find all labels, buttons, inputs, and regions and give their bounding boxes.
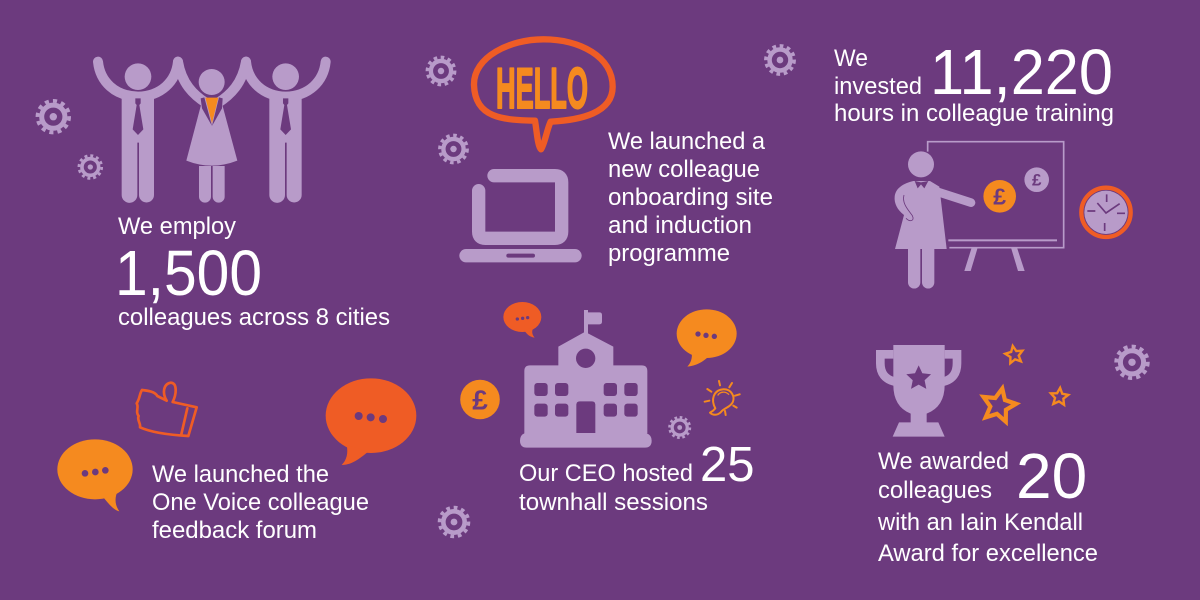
- icon: three colleagues with raised arms: [98, 62, 326, 203]
- text: training hours stat: hours in colleague training: [834, 100, 1114, 127]
- icon: town hall building: [520, 310, 652, 448]
- icon: light bulb: [705, 381, 740, 415]
- icon: gear 5: [766, 46, 794, 74]
- icon: lilac pound coin: [1024, 167, 1049, 192]
- text: onboarding site: and induction: [608, 212, 752, 239]
- icon: small star top: [1004, 344, 1024, 364]
- icon: trophy: [880, 345, 957, 437]
- text: awards stat: with an Iain Kendall: [877, 509, 1083, 536]
- icon: hello speech bubble: HELLO: [496, 57, 588, 121]
- icon: orange pound coin: £: [993, 184, 1006, 210]
- text: townhall sessions stat: [519, 438, 755, 516]
- text: training hours stat: We: [834, 45, 868, 72]
- icon: small red speech bubble: [503, 302, 541, 338]
- icon: presenter at whiteboard: [895, 142, 1064, 288]
- text: training hours stat: 11,220: [930, 36, 1113, 108]
- icon: large star: [979, 385, 1019, 423]
- text: one voice forum: We launched the: [152, 461, 329, 488]
- icon: gear 4: [440, 135, 467, 163]
- text: townhall sessions stat: townhall sessions: [519, 489, 708, 516]
- text: one voice forum: [152, 461, 369, 544]
- text: training hours stat: invested: [834, 73, 922, 100]
- text: we employ stat: We employ: [118, 213, 236, 240]
- text: onboarding site: onboarding site: [608, 184, 773, 211]
- text: one voice forum: One Voice colleague: [152, 489, 369, 516]
- icon: thumbs up: [137, 383, 197, 436]
- icon: gear 8: [439, 507, 469, 537]
- icon: gear 2: [79, 156, 102, 178]
- text: onboarding site: [608, 128, 773, 267]
- icon: laptop: [459, 176, 582, 262]
- icon: hello speech bubble: [474, 39, 613, 149]
- icon: gear 6: [669, 417, 690, 438]
- text: townhall sessions stat: 25: [700, 438, 755, 492]
- text: we employ stat: 1,500: [115, 237, 262, 309]
- icon: orange pound coin: [983, 180, 1016, 213]
- text: onboarding site: new colleague: [608, 156, 760, 183]
- icon: wall clock: [1081, 188, 1131, 237]
- icon: gear 1: [38, 101, 69, 132]
- text: training hours stat: [834, 36, 1114, 127]
- icon: pound coin left of town hall: [460, 380, 500, 419]
- text: onboarding site: programme: [608, 240, 730, 267]
- text: awards stat: We awarded: [878, 448, 1009, 475]
- icon: gear 7: [1116, 346, 1148, 378]
- icon: one voice red speech bubble: [326, 378, 416, 465]
- text: awards stat: 20: [1016, 440, 1087, 512]
- text: one voice forum: feedback forum: [152, 517, 317, 544]
- icon: small star right: [1050, 387, 1069, 405]
- text: awards stat: Award for excellence: [878, 540, 1098, 567]
- text: we employ stat: colleagues across 8 cities: [118, 304, 390, 331]
- text: onboarding site: We launched a: [608, 128, 766, 155]
- icon: orange speech bubble: [677, 309, 737, 367]
- text: awards stat: colleagues: [878, 477, 992, 504]
- icon: gear 3: [427, 57, 455, 85]
- text: we employ stat: [115, 213, 390, 331]
- text: townhall sessions stat: Our CEO hosted: [519, 460, 693, 487]
- icon: pound coin left of town hall: £: [472, 384, 488, 416]
- text: awards stat: [877, 440, 1098, 567]
- icon: lilac pound coin: £: [1032, 171, 1042, 190]
- icon: one voice orange speech bubble: [57, 439, 133, 511]
